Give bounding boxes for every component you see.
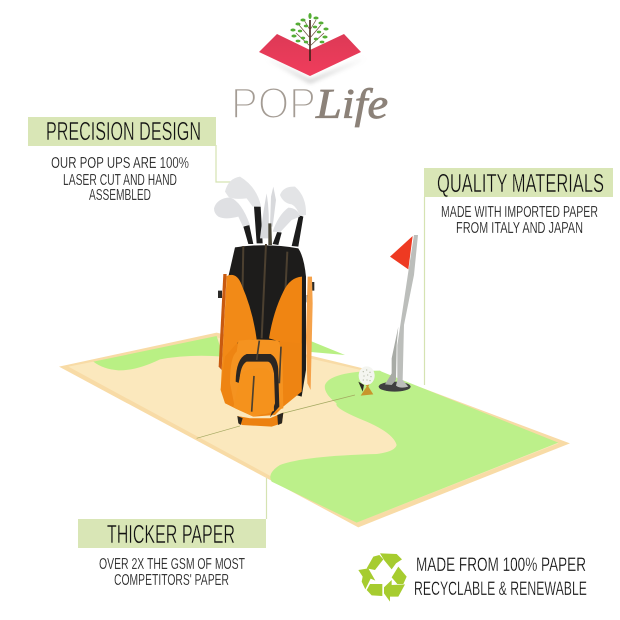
- heading box: [424, 168, 613, 197]
- flag pole: [396, 235, 418, 388]
- left side strap: [219, 274, 227, 370]
- body text: COMPETITORS' PAPER: [114, 572, 229, 589]
- red flag: [390, 236, 413, 269]
- callout: thicker paper: [78, 519, 266, 589]
- logo chevron: [259, 34, 366, 83]
- leader lines: [216, 145, 424, 519]
- logo tree: [290, 13, 329, 61]
- right orange panel: [269, 277, 302, 403]
- icon: recycle symbol: [358, 553, 407, 602]
- heading box: [28, 117, 216, 146]
- card border: [59, 333, 570, 527]
- body text: OUR POP UPS ARE 100%: [51, 155, 189, 172]
- right side strip: [306, 277, 313, 390]
- left orange panel: [221, 275, 257, 400]
- recycling statement: [414, 554, 587, 600]
- pocket slots: [252, 341, 281, 412]
- pocket strap: [236, 354, 279, 417]
- bag dividers: [242, 244, 287, 347]
- callout: quality materials: [424, 168, 613, 237]
- logo: Pop Life: [231, 13, 388, 128]
- clubs: [214, 177, 306, 247]
- heading: PRECISION DESIGN: [46, 118, 201, 146]
- pop-up card base: [59, 333, 570, 527]
- heading box: [78, 519, 266, 548]
- body text: [441, 204, 598, 237]
- green: top-left fairway: [93, 336, 223, 370]
- body text: [99, 556, 245, 589]
- logo wordmark Life: Life: [315, 82, 388, 128]
- body text: ASSEMBLED: [89, 187, 151, 204]
- callout: precision design: [28, 117, 216, 204]
- hole base: [379, 382, 411, 392]
- golf ball tee: [358, 366, 375, 396]
- body text: OVER 2X THE GSM OF MOST: [99, 556, 245, 573]
- heading: THICKER PAPER: [107, 521, 235, 549]
- card fold line: [197, 395, 355, 438]
- sand surface: [68, 337, 558, 523]
- logo wordmark POP: POP: [231, 79, 316, 128]
- lower bag panel: [221, 342, 302, 417]
- side tabs: [218, 282, 314, 366]
- front flap: [233, 368, 274, 415]
- golf bag: [214, 177, 314, 427]
- bag base: [237, 413, 283, 427]
- green: top-right fairway: [307, 339, 345, 355]
- flag and tee: [358, 235, 418, 396]
- green: main fairway: [270, 371, 558, 523]
- body text: LASER CUT AND HAND: [63, 172, 177, 189]
- bag body: [228, 245, 306, 397]
- body text: [51, 155, 189, 204]
- front pocket: [230, 339, 283, 417]
